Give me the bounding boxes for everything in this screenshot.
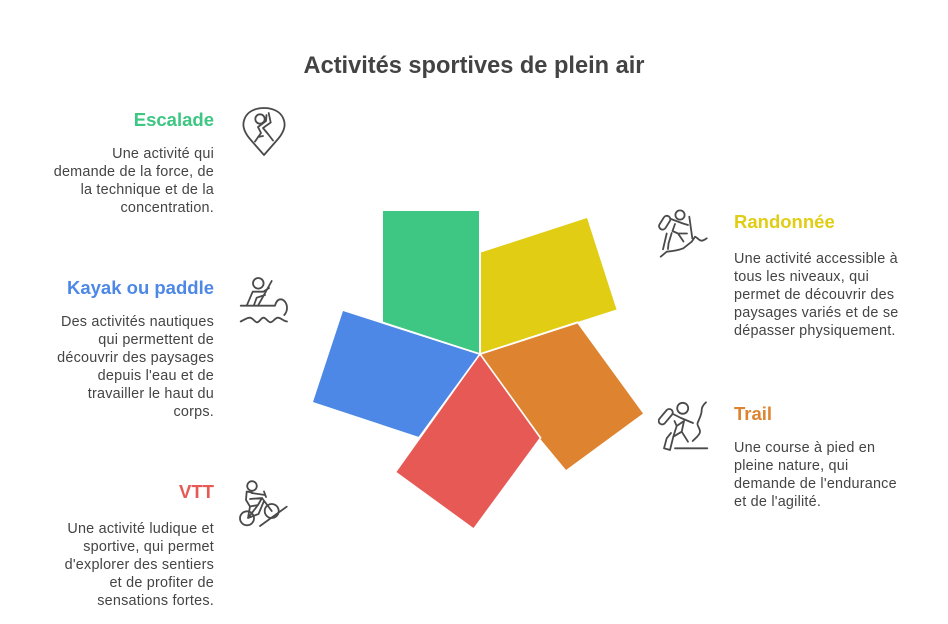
description: Randonnée: paysages variés et de se	[734, 305, 898, 321]
title: Activités sportives de plein air	[304, 53, 644, 79]
description: Kayak ou paddle: depuis l'eau et de	[98, 368, 214, 384]
icon: Kayak paddler	[240, 277, 288, 324]
description: VTT: sensations fortes.	[97, 593, 214, 609]
heading: Trail: Trail	[734, 403, 772, 424]
description: Randonnée: permet de découvrir des	[734, 287, 894, 303]
description: Randonnée: tous les niveaux, qui	[734, 269, 869, 285]
description: Trail	[734, 440, 897, 510]
description: Kayak ou paddle: qui permettent de	[98, 332, 214, 348]
description: Kayak ou paddle: travailler le haut du	[88, 386, 214, 402]
description: Escalade: concentration.	[121, 200, 214, 216]
description: Escalade	[54, 146, 214, 216]
description: VTT: d'explorer des sentiers	[65, 557, 214, 573]
description: Kayak ou paddle	[57, 314, 214, 420]
segment: Kayak blue	[313, 311, 480, 437]
description: Trail: Une course à pied en	[734, 440, 875, 456]
icon: Randonnée hiker	[658, 210, 708, 258]
description: Trail: demande de l'endurance	[734, 476, 897, 492]
pinwheel chart	[313, 211, 643, 528]
description: Escalade: demande de la force, de	[54, 164, 214, 180]
description: Trail: pleine nature, qui	[734, 458, 848, 474]
heading: VTT: VTT	[179, 481, 214, 502]
description: Kayak ou paddle: découvrir des paysages	[57, 350, 214, 366]
icon: VTT cyclist	[239, 480, 288, 527]
description: VTT: sportive, qui permet	[83, 539, 214, 555]
description: Randonnée: dépasser physiquement.	[734, 323, 896, 339]
heading: Randonnée: Randonnée	[734, 211, 835, 232]
description: Escalade: Une activité qui	[112, 146, 214, 162]
segment: Escalade green	[383, 211, 479, 354]
icon: Escalade climber in map pin	[242, 107, 286, 156]
heading: Kayak ou paddle: Kayak ou paddle	[67, 277, 214, 298]
description: VTT: Une activité ludique et	[67, 521, 214, 537]
segment: Trail orange	[480, 324, 643, 470]
description: Randonnée	[734, 251, 898, 339]
description: Randonnée: Une activité accessible à	[734, 251, 898, 267]
description: Kayak ou paddle: Des activités nautiques	[61, 314, 214, 330]
description: Kayak ou paddle: corps.	[173, 404, 214, 420]
icon: Trail runner	[658, 401, 708, 451]
segment: Randonnée yellow	[481, 218, 616, 353]
description: VTT	[65, 521, 214, 609]
description: VTT: et de profiter de	[109, 575, 214, 591]
description: Trail: et de l'agilité.	[734, 494, 821, 510]
description: Escalade: la technique et de la	[81, 182, 214, 198]
segment: VTT red	[396, 355, 540, 528]
heading: Escalade: Escalade	[134, 109, 214, 130]
